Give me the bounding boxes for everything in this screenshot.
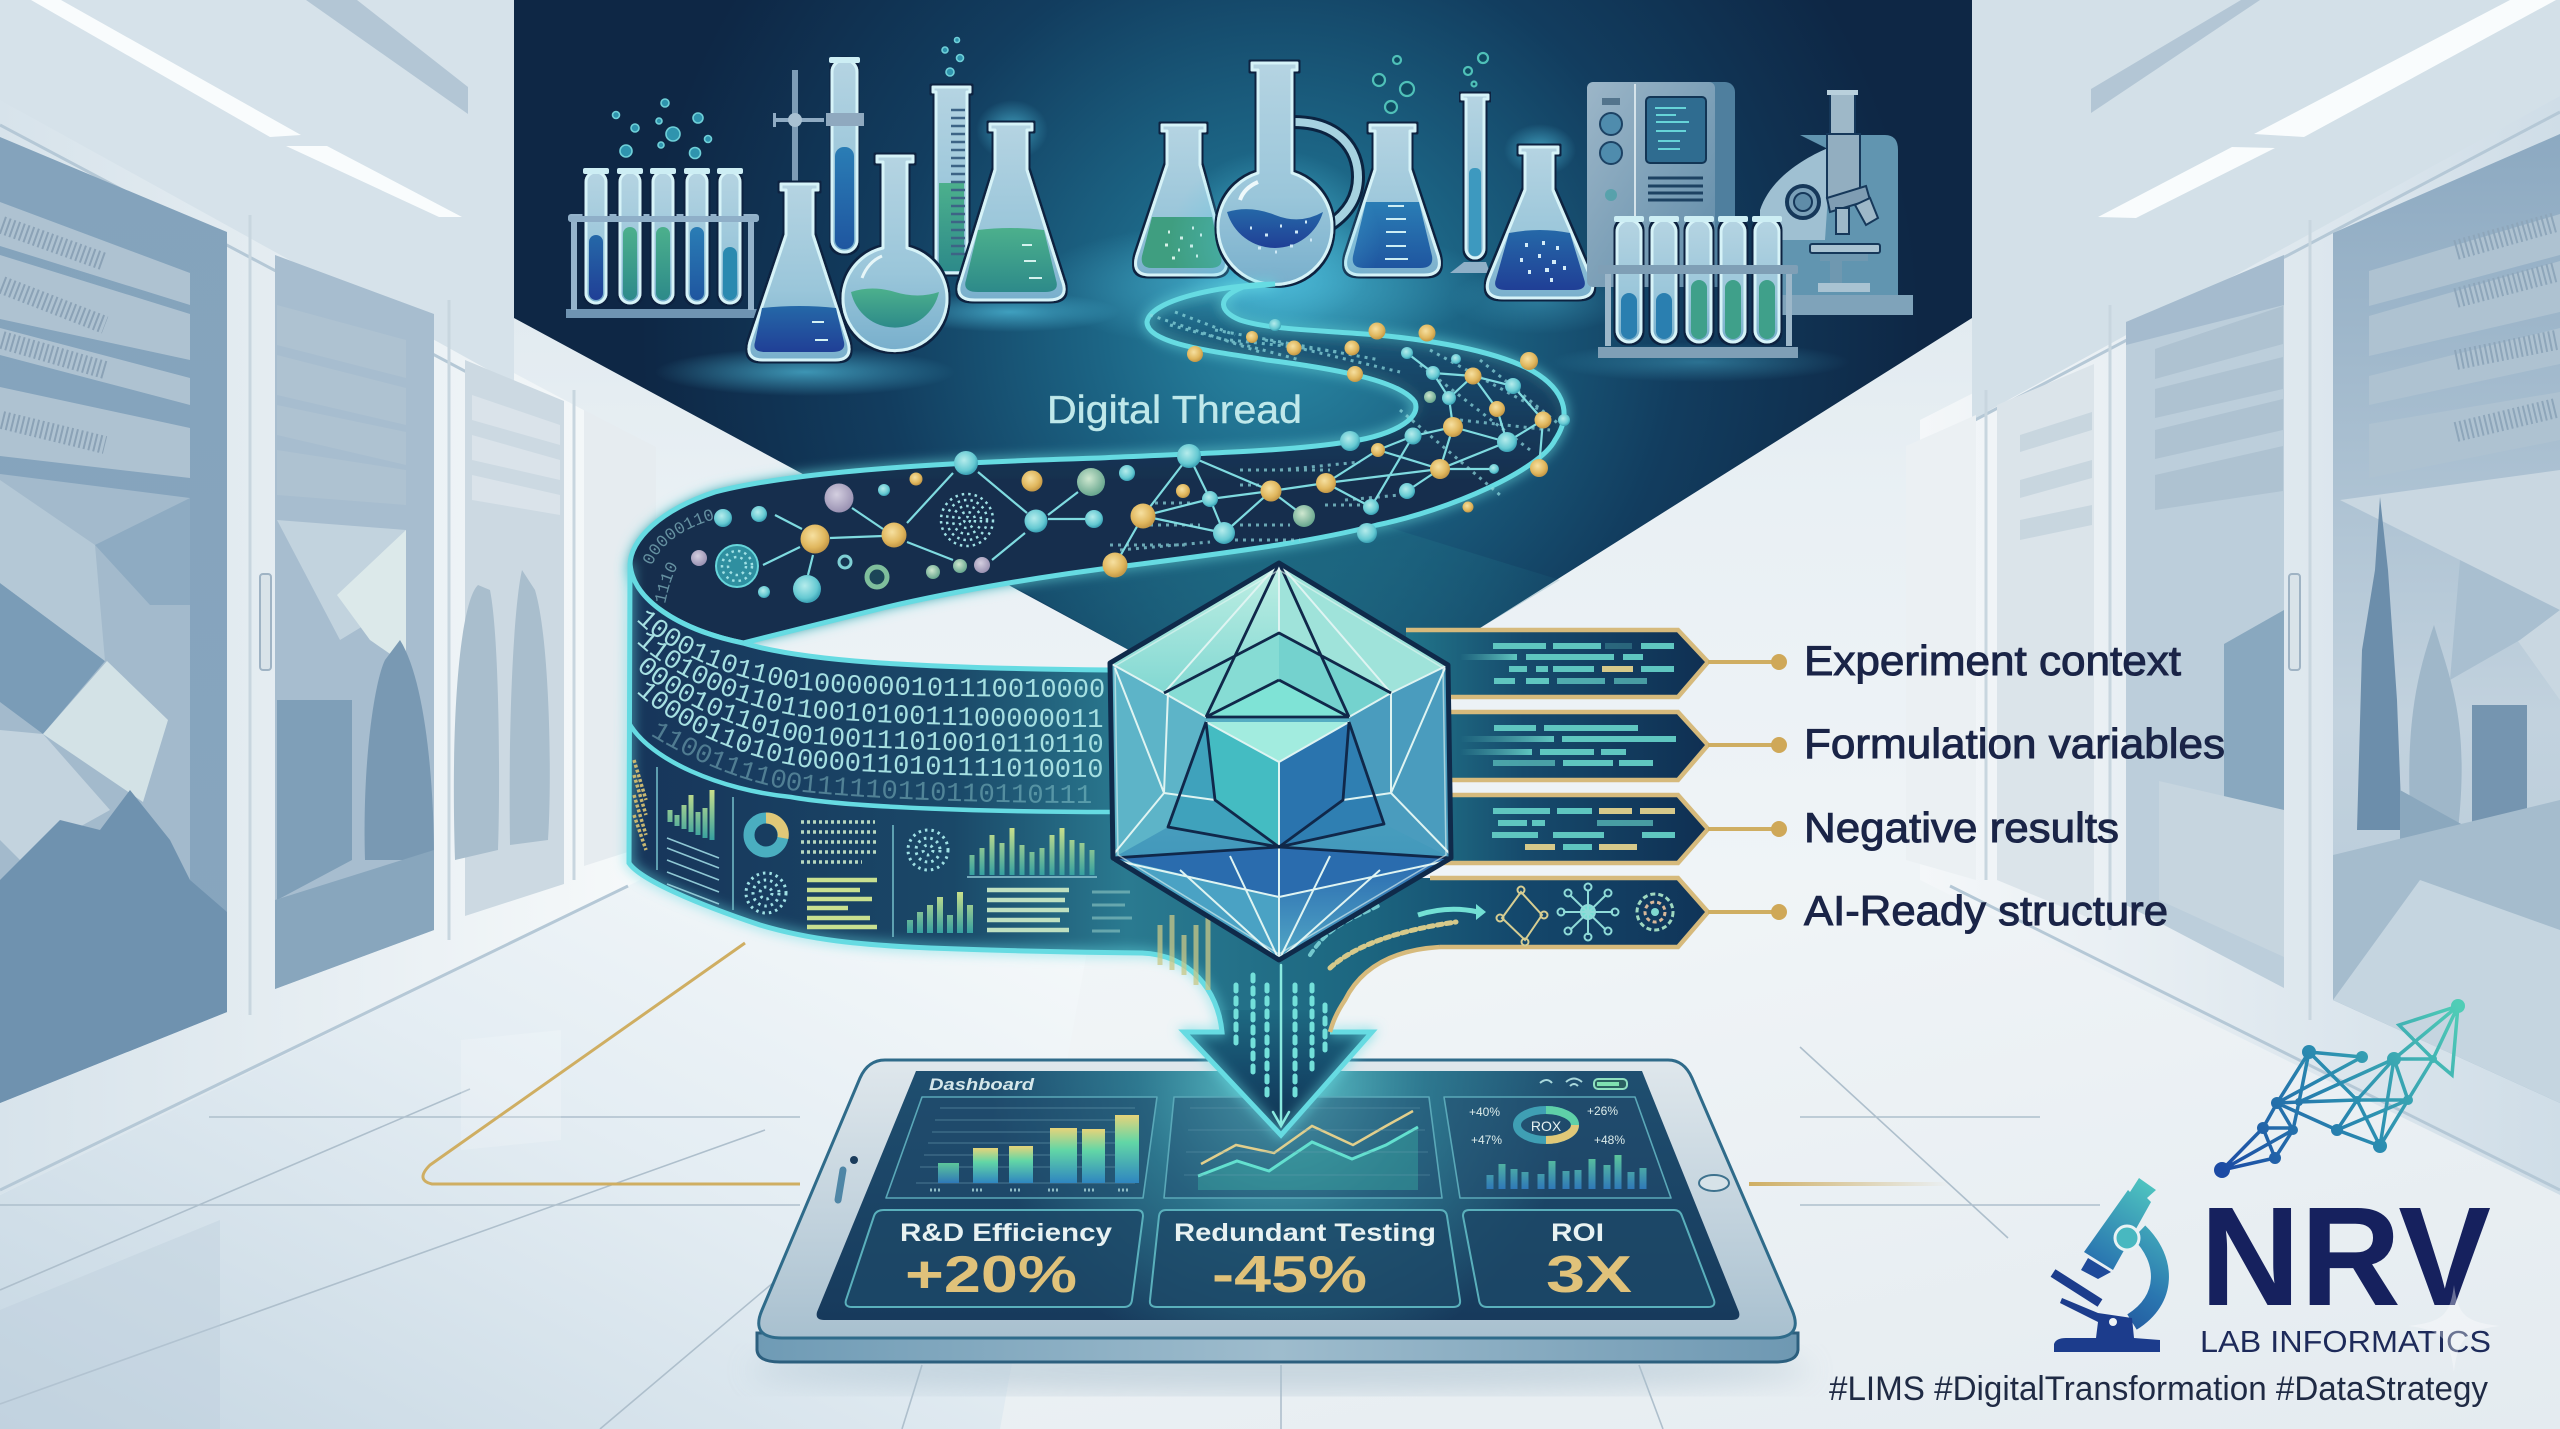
- icon: rising network arrow: [2214, 999, 2465, 1178]
- icon: labware glow pools: [655, 220, 1850, 396]
- panel: data dashboard tablet: [750, 1060, 1810, 1392]
- icon: clamp stand and tube: [773, 57, 864, 252]
- icon: bubbles right: [1373, 53, 1488, 113]
- cyan nodes: [691, 319, 1570, 603]
- icon: test tube rack left: [566, 168, 759, 318]
- icon: logo microscope: [2053, 1178, 2160, 1352]
- label: AI-Ready structure: AI-Ready structure: [1804, 887, 2168, 934]
- panel: ROI donut and bars: +47%: [1471, 1133, 1502, 1147]
- binary data rows: 1100111100111110110110110111: [652, 723, 1091, 803]
- panel: tag negative results: [1400, 795, 1708, 863]
- wrapped binary on ribbon bend: [643, 510, 713, 603]
- stat card: R&D Efficiency: R&D Efficiency: [900, 1219, 1112, 1247]
- icon: graduated cylinder left: [933, 87, 970, 273]
- panel: tag AI-ready structure: [1418, 878, 1708, 947]
- icon: microscope dark panel: [1760, 90, 1913, 315]
- stat card: Redundant Testing: Redundant Testing: [1174, 1219, 1436, 1247]
- connector: experiment context: [1708, 654, 1787, 670]
- stat card: R&D Efficiency: +20%: [905, 1246, 1077, 1304]
- panel: line chart: [1164, 1097, 1442, 1198]
- icon: green erlenmeyer flask centre-left: [1136, 125, 1226, 275]
- tablet hardware buttons: [838, 1156, 1729, 1200]
- stat card: ROI: [1463, 1210, 1714, 1307]
- icon: blue flask with particles right: [1487, 124, 1593, 298]
- icon: crystal data hexagon: [1110, 563, 1451, 960]
- network data dots: [1110, 312, 1560, 550]
- binary data rows: 100001101010000110101111010010: [638, 682, 1102, 778]
- gold nodes: [800, 322, 1552, 578]
- panel: ROI donut and bars: [1444, 1097, 1671, 1198]
- panel: ROI donut and bars: ROX: [1531, 1118, 1562, 1134]
- panel: dark lab backdrop: [514, 0, 1972, 742]
- stat card: R&D Efficiency: [846, 1210, 1143, 1307]
- binary data rows: 000010110100100111010010110110: [640, 658, 1102, 752]
- cell node: [716, 545, 758, 587]
- dotted data sphere: [941, 494, 993, 546]
- icon: glowing round flask with handle: [1170, 63, 1380, 330]
- mini charts on wall: [634, 760, 1208, 990]
- stat card: ROI: 3X: [1546, 1246, 1632, 1304]
- panel glow beneath the thread: [1008, 500, 1560, 742]
- binary data rows: [637, 610, 1104, 803]
- network links: [763, 353, 1543, 575]
- icon: test tube rack right: [1598, 216, 1798, 358]
- icon: hub network: [1558, 884, 1618, 940]
- tablet screen: [817, 1071, 1739, 1320]
- logo subtitle: LAB INFORMATICS: LAB INFORMATICS: [2200, 1324, 2491, 1359]
- wrapped binary on ribbon bend: 1110: [655, 562, 676, 603]
- wrapped binary on ribbon bend: 000001100: [643, 510, 713, 564]
- watermark sparkle: [2408, 1285, 2500, 1372]
- icon: ornate AI node: [1637, 894, 1673, 930]
- connector: AI-ready structure: [1708, 904, 1787, 920]
- connector: negative results: [1708, 821, 1787, 837]
- stat card: Redundant Testing: -45%: [1212, 1246, 1367, 1304]
- icon: blue erlenmeyer flask left: [749, 184, 849, 360]
- binary data rows: 100011011001000000101110010000: [637, 610, 1104, 698]
- binary data rows: 110100011011001010011100000011: [638, 632, 1102, 728]
- heading: Digital Thread label: Digital Thread: [1047, 389, 1302, 432]
- logo wordmark: NRV: NRV: [2200, 1177, 2491, 1335]
- label: Formulation variables: Formulation variables: [1804, 720, 2225, 767]
- arrow data streams: [1236, 905, 1456, 1126]
- panel: data wall, binary and charts funnelling to arrow: [618, 558, 1705, 1142]
- gold floor circuit line: [423, 943, 1949, 1186]
- icon: diamond network: [1496, 886, 1548, 946]
- panel: ROI donut and bars: +26%: [1587, 1104, 1618, 1118]
- icon: blue erlenmeyer flask with scale: [1346, 125, 1439, 275]
- status icons: [1540, 1078, 1627, 1089]
- left server cabinet doors: [0, 137, 656, 1103]
- floor tile lines: [0, 1030, 2100, 1429]
- label: Experiment context: Experiment context: [1804, 637, 2181, 684]
- icon: flask with green liquid right of rack: [959, 100, 1064, 300]
- hashtags: #LIMS #DigitalTransformation #DataStrategy: [1829, 1370, 2488, 1408]
- panel: ROI donut and bars: +48%: [1594, 1133, 1625, 1147]
- panel: tag formulation variables: [1400, 712, 1708, 780]
- stat card: Redundant Testing: [1150, 1210, 1460, 1307]
- icon: cylinder on foot right: [1450, 95, 1490, 273]
- connector: formulation variables: [1708, 737, 1787, 753]
- icon: lab analyser machine: [1587, 82, 1735, 287]
- panel: tag experiment context: [1406, 630, 1708, 697]
- icon: bubbles left: [612, 38, 964, 158]
- label: Negative results: Negative results: [1804, 804, 2119, 851]
- stat card: ROI: ROI: [1551, 1219, 1604, 1247]
- dashboard title: Dashboard: [929, 1075, 1035, 1094]
- right server cabinet doors: [1906, 134, 2560, 1103]
- panel: ROI donut and bars: +40%: [1469, 1105, 1500, 1119]
- panel: digital thread ribbon: [619, 274, 1575, 648]
- icon: round flask left: [843, 156, 947, 351]
- panel: bar chart: [886, 1097, 1157, 1198]
